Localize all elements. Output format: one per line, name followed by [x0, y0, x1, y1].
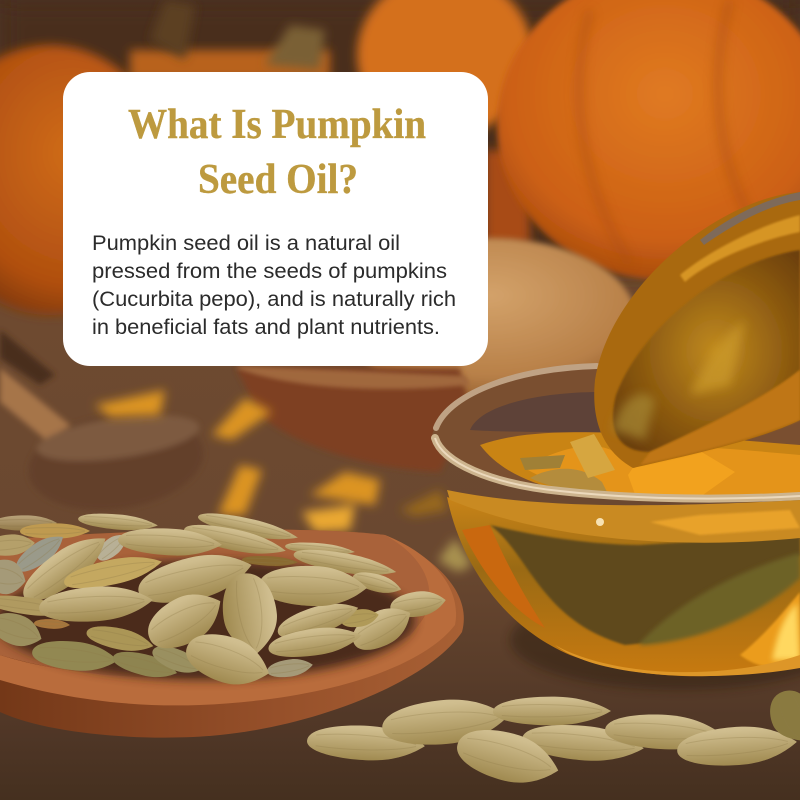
heading: Seed Oil?: [198, 157, 358, 203]
blurred pumpkins in background: [0, 0, 800, 402]
heading: What Is Pumpkin: [128, 102, 426, 148]
body text: (Cucurbita pepo), and is naturally rich: [92, 287, 456, 311]
wooden bowl behind: [236, 366, 470, 472]
wooden plate: [0, 530, 464, 738]
pouring golden spoon: [594, 192, 800, 468]
body text: [92, 231, 456, 339]
pumpkin seeds on plate: [0, 508, 447, 695]
glass rim: [436, 366, 597, 428]
loose pumpkin seeds on table: [306, 684, 800, 794]
amber glass band below rim: [447, 490, 800, 543]
body text: Pumpkin seed oil is a natural oil: [92, 231, 400, 255]
oil surface: [480, 432, 800, 500]
seeds seen through glass: [490, 525, 800, 645]
body text: pressed from the seeds of pumpkins: [92, 259, 447, 283]
interior back of bowl: [432, 365, 800, 500]
body text: in beneficial fats and plant nutrients.: [92, 315, 440, 339]
heading: [128, 102, 426, 203]
wooden spoon on left: [0, 330, 210, 521]
scattered orange petals: [95, 390, 472, 572]
white text card: [63, 72, 488, 366]
glass bowl of oil: [432, 365, 800, 690]
glass body with oil: [447, 497, 800, 676]
